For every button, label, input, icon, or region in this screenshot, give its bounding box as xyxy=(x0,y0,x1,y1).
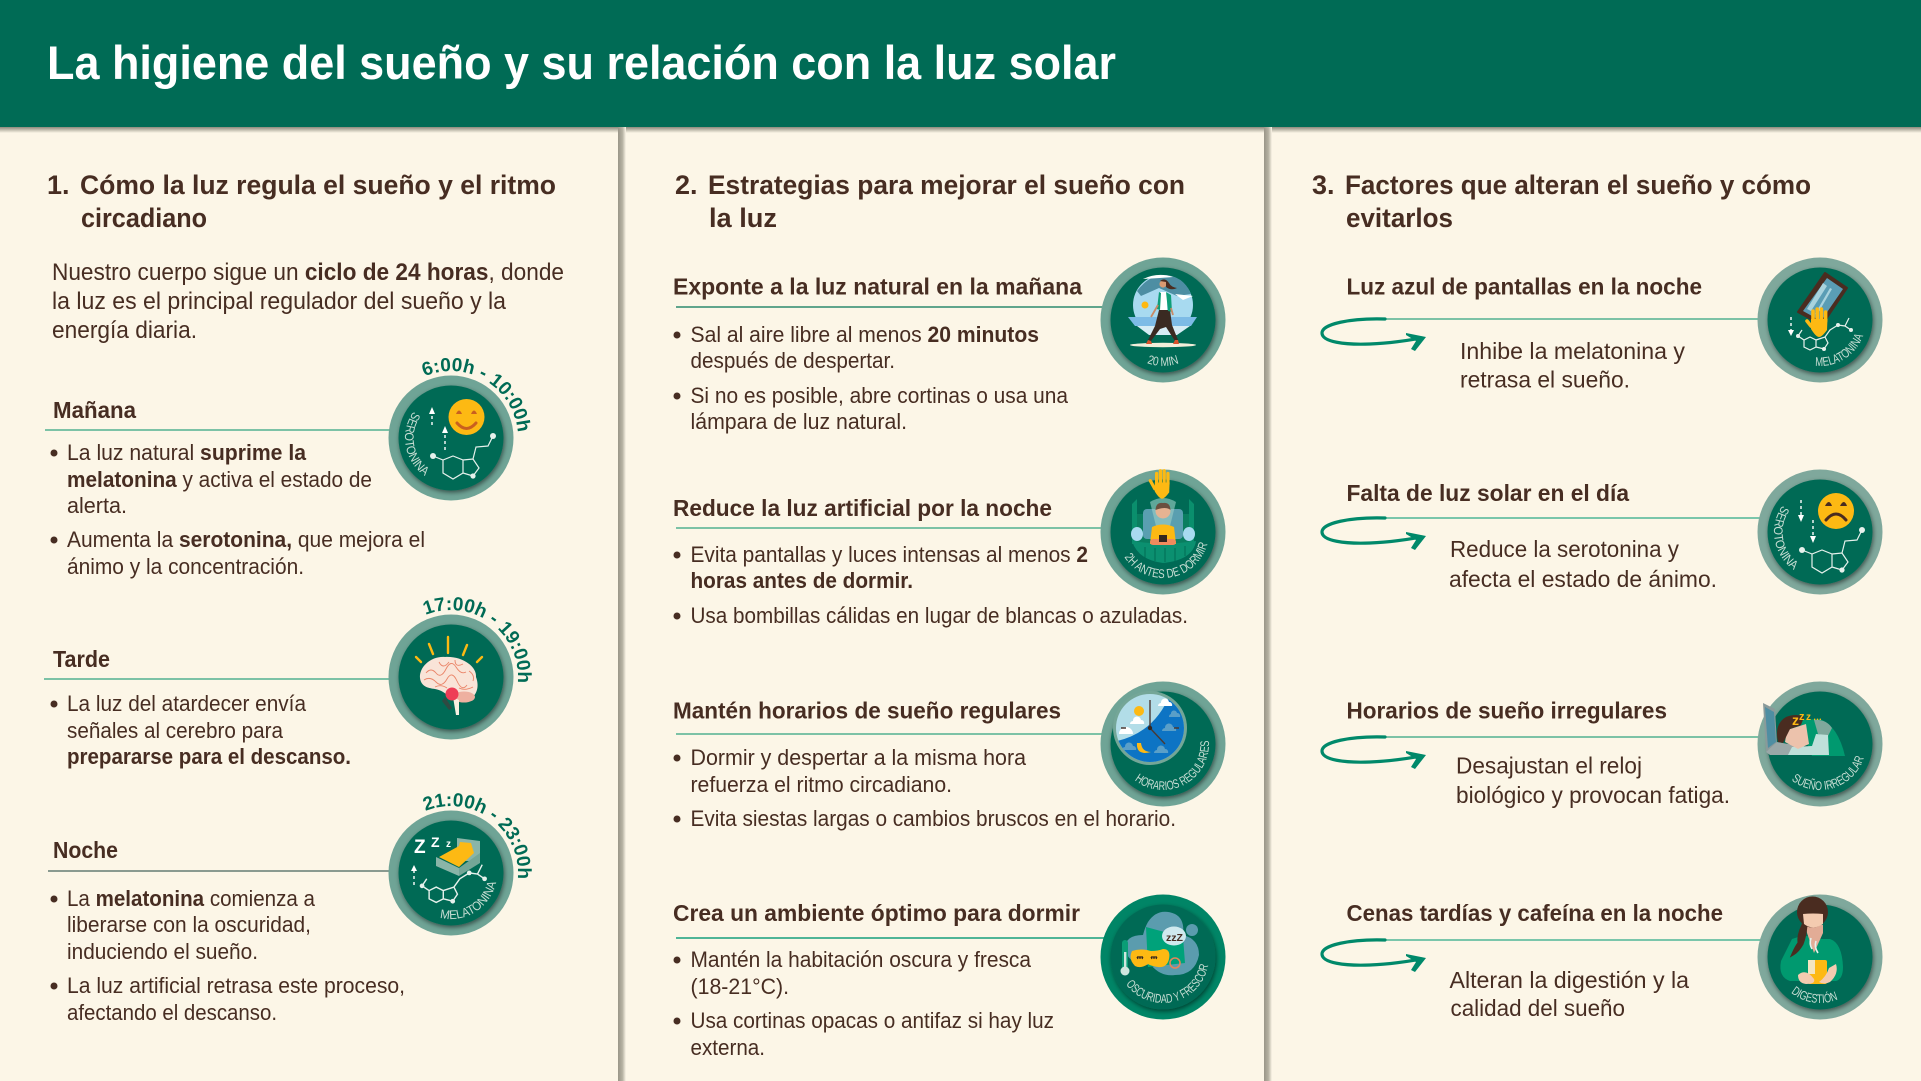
text cenas: Alteran la digestión y la xyxy=(1450,967,1689,993)
bullets horarios: refuerza el ritmo circadiano. xyxy=(690,772,952,797)
subheading luz azul: Luz azul de pantallas en la noche xyxy=(1346,274,1702,300)
icon: serotonina feliz xyxy=(388,358,530,500)
bullets ambiente: Mantén la habitación oscura y fresca xyxy=(690,947,1032,972)
icon: persona con móvil en la cama xyxy=(1100,469,1226,594)
bullets noche: La melatonina comienza a xyxy=(67,886,316,911)
subheading cenas: Cenas tardías y cafeína en la noche xyxy=(1346,900,1723,926)
icon: cama melatonina xyxy=(388,793,532,936)
heading 1: circadiano xyxy=(81,203,207,233)
bullets ambiente: externa. xyxy=(690,1035,765,1060)
panel 3: factores xyxy=(1312,170,1882,1021)
section: ambiente xyxy=(673,894,1226,1060)
icon: mujer caminando: 20 MIN xyxy=(1147,355,1178,366)
bullets ambiente: (18-21°C). xyxy=(690,974,789,999)
bullets mañana: ánimo y la concentración. xyxy=(67,554,304,579)
bullets horarios xyxy=(674,745,1176,831)
icon: serotonina triste: SEROTONINA xyxy=(1774,506,1797,570)
bullets tarde xyxy=(50,691,351,769)
bullets tarde: La luz del atardecer envía xyxy=(67,691,307,716)
subheading exponte: Exponte a la luz natural en la mañana xyxy=(673,274,1082,300)
bullets mañana: La luz natural suprime la xyxy=(67,440,307,465)
subheading falta de luz: Falta de luz solar en el día xyxy=(1346,480,1629,506)
icon: cerebro xyxy=(388,597,532,740)
icon: persona dormida sobre portátil: z xyxy=(1792,712,1799,728)
icon: persona dormida sobre portátil: z xyxy=(1806,712,1811,723)
text horarios irregulares xyxy=(1456,752,1730,808)
bullets ambiente: Usa cortinas opacas o antifaz si hay luz xyxy=(690,1008,1054,1033)
text luz azul: retrasa el sueño. xyxy=(1460,366,1630,392)
bullets mañana: alerta. xyxy=(67,493,127,518)
bullets noche: induciendo el sueño. xyxy=(67,939,258,964)
icon: móvil con mano xyxy=(1758,258,1882,382)
section: mañana xyxy=(45,358,530,579)
panel shadow: column dividers xyxy=(618,127,1272,1081)
bullets exponte: lámpara de luz natural. xyxy=(690,409,907,434)
heading 1: Cómo la luz regula el sueño y el ritmo xyxy=(80,170,556,200)
icon: antifaz y almohada xyxy=(1100,894,1226,1020)
arrow xyxy=(1322,518,1426,550)
subheading noche: Noche xyxy=(53,837,118,863)
time label 21:00h: 21:00h - 23:00h xyxy=(423,793,532,878)
bullets tarde: prepararse para el descanso. xyxy=(67,744,351,769)
bullets exponte xyxy=(674,322,1069,434)
bullets horarios: Dormir y despertar a la misma hora xyxy=(690,745,1027,770)
header band xyxy=(0,0,1921,127)
intro text: Nuestro cuerpo sigue un ciclo de 24 horas, donde xyxy=(52,259,564,286)
icon: antifaz y almohada: OSCURIDAD Y FRESCOR xyxy=(1127,964,1208,1003)
heading 1: 1. xyxy=(47,170,70,200)
bullets noche xyxy=(50,886,405,1025)
icon: cama melatonina: Z xyxy=(414,837,426,858)
bullets noche: La luz artificial retrasa este proceso, xyxy=(67,973,405,998)
bullets exponte: Si no es posible, abre cortinas o usa una xyxy=(690,383,1069,408)
icon: cama melatonina: z xyxy=(446,839,451,850)
bullets horarios: Evita siestas largas o cambios bruscos en el horario. xyxy=(690,806,1176,831)
subheading mañana: Mañana xyxy=(53,397,136,423)
section: noche xyxy=(48,793,532,1025)
panel 1: cómo la luz regula el sueño xyxy=(44,170,564,1025)
bullets exponte: Sal al aire libre al menos 20 minutos xyxy=(690,322,1039,347)
icon: móvil con mano: MELATONINA xyxy=(1816,334,1864,366)
bullets reduce: Evita pantallas y luces intensas al menos 2 xyxy=(690,542,1088,567)
bullets reduce: horas antes de dormir. xyxy=(690,568,913,593)
intro text xyxy=(52,259,564,344)
icon: persona dormida sobre portátil xyxy=(1758,682,1882,806)
panel 2: estrategias xyxy=(673,170,1226,1060)
bullets noche: afectando el descanso. xyxy=(67,1000,277,1025)
icon: reloj día y noche xyxy=(1100,682,1226,806)
heading 3: 3. xyxy=(1312,170,1335,200)
section: exponte xyxy=(673,258,1226,434)
text falta de luz xyxy=(1449,536,1717,592)
section: cenas xyxy=(1320,894,1882,1021)
heading 2: la luz xyxy=(709,203,777,233)
icon: persona dormida sobre portátil: … xyxy=(1813,712,1822,722)
bullets ambiente xyxy=(674,947,1054,1060)
heading 2: Estrategias para mejorar el sueño con xyxy=(708,170,1185,200)
title: La higiene del sueño y su relación con la luz solar xyxy=(47,36,1116,89)
text horarios irregulares: Desajustan el reloj xyxy=(1456,752,1642,778)
text falta de luz: afecta el estado de ánimo. xyxy=(1449,566,1717,592)
icon: reloj día y noche: HORARIOS REGULARES xyxy=(1135,741,1210,790)
heading 1 xyxy=(47,170,556,233)
subheading tarde: Tarde xyxy=(53,646,110,672)
section: luz azul xyxy=(1320,258,1882,392)
text cenas xyxy=(1450,967,1689,1021)
text luz azul xyxy=(1460,338,1685,392)
section: falta de luz xyxy=(1320,470,1882,594)
icon: serotonina feliz: SEROTONINA xyxy=(404,412,428,476)
text cenas: calidad del sueño xyxy=(1450,995,1625,1021)
bullets mañana: melatonina y activa el estado de xyxy=(67,467,372,492)
bullets tarde: señales al cerebro para xyxy=(67,718,284,743)
bullets reduce xyxy=(674,542,1188,628)
intro text: la luz es el principal regulador del sueño y la xyxy=(52,288,506,315)
heading 3 xyxy=(1312,170,1811,233)
icon: mujer caminando xyxy=(1100,258,1226,382)
intro text: energía diaria. xyxy=(52,317,197,344)
heading 3: Factores que alteran el sueño y cómo xyxy=(1345,170,1811,200)
subheading horarios irregulares: Horarios de sueño irregulares xyxy=(1346,698,1667,724)
heading 2 xyxy=(675,170,1185,233)
arrow xyxy=(1322,737,1426,769)
time label 17:00h: 17:00h - 19:00h xyxy=(423,597,532,682)
icon: serotonina triste xyxy=(1758,470,1882,594)
subheading reduce: Reduce la luz artificial por la noche xyxy=(673,495,1052,521)
text horarios irregulares: biológico y provocan fatiga. xyxy=(1456,782,1730,808)
icon: antifaz y almohada: zzZ xyxy=(1166,933,1183,944)
section: tarde xyxy=(44,597,532,769)
heading 3: evitarlos xyxy=(1346,203,1453,233)
bullets noche: liberarse con la oscuridad, xyxy=(67,912,311,937)
section: horarios irregulares xyxy=(1320,682,1882,808)
arrow xyxy=(1322,940,1426,972)
section: horarios xyxy=(673,682,1226,831)
bullets reduce: Usa bombillas cálidas en lugar de blancas o azuladas. xyxy=(690,603,1188,628)
text luz azul: Inhibe la melatonina y xyxy=(1460,338,1685,364)
text falta de luz: Reduce la serotonina y xyxy=(1450,536,1679,562)
icon: persona con móvil en la cama: 2H ANTES DE DORMIR xyxy=(1124,542,1208,578)
icon: cama melatonina: MELATONINA xyxy=(440,882,496,920)
bullets mañana xyxy=(50,440,425,579)
bullets exponte: después de despertar. xyxy=(690,348,895,373)
time label 6:00h: 6:00h - 10:00h xyxy=(422,358,530,432)
subheading horarios: Mantén horarios de sueño regulares xyxy=(673,698,1061,724)
bullets mañana: Aumenta la serotonina, que mejora el xyxy=(67,527,425,552)
icon: mujer con taza: DIGESTIÓN xyxy=(1792,986,1838,1003)
arrow xyxy=(1322,319,1426,351)
icon: persona dormida sobre portátil: SUEÑO IRREGULAR xyxy=(1792,756,1864,790)
icon: cama melatonina: Z xyxy=(431,834,440,850)
icon: persona dormida sobre portátil: z xyxy=(1799,711,1805,723)
subheading ambiente: Crea un ambiente óptimo para dormir xyxy=(673,900,1080,926)
heading 2: 2. xyxy=(675,170,698,200)
section: reduce xyxy=(673,469,1226,628)
header shadow xyxy=(0,127,1921,133)
icon: mujer con taza xyxy=(1758,894,1882,1020)
